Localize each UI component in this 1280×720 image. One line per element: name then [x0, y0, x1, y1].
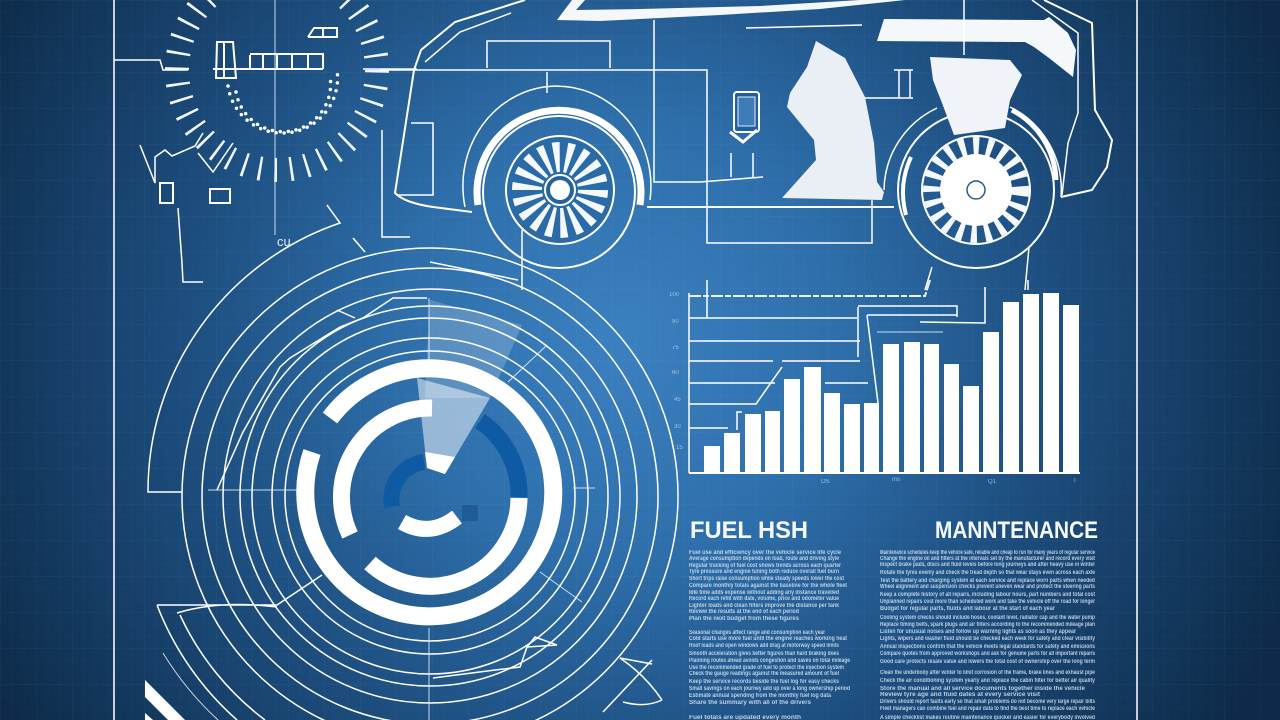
dark ring segments: [480, 421, 519, 497]
text block: fuel: Roof loads and open windows add drag at motorway speed limits: [689, 643, 840, 649]
text block: fuel: Check the gauge readings against the measured amount of fuel: [689, 671, 839, 677]
rear wheel: [884, 107, 1061, 268]
front wheel: [463, 86, 651, 268]
text block: maintenance: Test the battery and charging system at each service and replace worn parts when needed: [880, 578, 1095, 584]
roof panel: [557, 0, 905, 21]
text block: maintenance: Rotate the tyres evenly and check the tread depth so that wear stays even across each axle: [880, 570, 1096, 576]
pale wedge: [425, 300, 522, 398]
axis labels: 45: [674, 397, 681, 403]
dimension label: cu: [277, 234, 291, 249]
text block: fuel: Plan the next budget from these figures: [689, 616, 800, 622]
text block: fuel: Smooth acceleration gives better figures than hard braking does: [689, 651, 840, 657]
text block: fuel: Share the summary with all of the drivers: [689, 700, 812, 706]
gauge sketch: [114, 0, 417, 282]
axis labels: [669, 292, 1077, 485]
text block: maintenance: Check the air conditioning system yearly and replace the cabin filter for better air quality: [880, 678, 1096, 684]
text block: maintenance: Wheel alignment and suspension checks prevent uneven wear and protect the steering parts: [880, 584, 1096, 590]
text block: fuel: Fuel use and efficiency over the vehicle service life cycle: [689, 550, 842, 556]
text block: fuel: Small savings on each journey add up over a long ownership period: [689, 686, 850, 692]
axis labels: 90: [672, 319, 679, 325]
text block: fuel: Seasonal changes affect range and consumption each year: [689, 630, 826, 636]
axis labels: 60: [672, 370, 679, 376]
axis labels: 75: [672, 345, 679, 351]
axis labels: 100: [669, 292, 680, 298]
axis labels: 15: [676, 445, 683, 451]
concentric blueprint circles: [148, 205, 678, 720]
text block: maintenance: Annual inspections confirm that the vehicle meets legal standards for safety and emissions: [880, 644, 1096, 650]
text block: maintenance: Maintenance schedules keep the vehicle safe, reliable and cheap to run for many years of regular service: [880, 550, 1095, 556]
door panel: [782, 41, 884, 200]
heading: fuel: FUEL HSH: [690, 517, 808, 544]
text block: maintenance: Change the engine oil and filters at the intervals set by the manufacturer and record every visit: [880, 556, 1095, 562]
text block: maintenance: Keep a complete history of all repairs, including labour hours, part numbers and total cost: [880, 592, 1095, 598]
text block: maintenance: Clean the underbody after winter to limit corrosion of the frame, brake lines and exhaust pipe: [880, 670, 1096, 676]
text block: fuel: Keep the service records beside the fuel log for easy checks: [689, 679, 840, 685]
chart guide lines: [689, 280, 1028, 473]
corner stripes: [145, 680, 185, 720]
text block: maintenance: Budget for regular parts, fluids and labour at the start of each year: [880, 606, 1056, 612]
text block: maintenance: Good care protects resale value and lowers the total cost of ownership over the long term: [880, 659, 1095, 665]
text block: maintenance: Replace timing belts, spark plugs and air filters according to the recommended mileage plan: [880, 622, 1095, 628]
text block: maintenance: Drivers should report faults early so that small problems do not become very large repair bills: [880, 699, 1096, 705]
dimension label: [277, 234, 365, 252]
bars: [704, 293, 1079, 473]
text block: fuel: Review the results at the end of each period: [689, 609, 799, 615]
text block: fuel: Regular tracking of fuel cost shows trends across each quarter: [689, 563, 842, 569]
text block: fuel: Average consumption depends on load, route and driving style: [689, 556, 840, 562]
inner ring segments: [402, 517, 457, 529]
text block: fuel: Compare monthly totals against the baseline for the whole fleet: [689, 583, 847, 589]
text block: fuel: Planning routes ahead avoids congestion and saves on total mileage: [689, 658, 851, 664]
text block: fuel: Cold starts use more fuel until the engine reaches working heat: [689, 636, 847, 642]
icon: charging device: [730, 92, 759, 142]
text block: fuel: Use the recommended grade of fuel to protect the injection system: [689, 665, 844, 671]
text block: maintenance: Unplanned repairs cost more than scheduled work and take the vehicle off the road for longer: [880, 599, 1096, 605]
text block: maintenance: Listen for unusual noises and follow up warning lights as soon as they appear: [880, 629, 1077, 635]
rear upper panel: [877, 17, 1076, 77]
text block: fuel: Record each refill with date, volume, price and odometer value: [689, 596, 840, 602]
text block: fuel: Lighter loads and clean filters improve the distance per tank: [689, 603, 840, 609]
text block: maintenance: Review tyre age and fluid dates at every service visit: [880, 692, 1040, 698]
bar chart: [669, 280, 1080, 485]
axis labels: T: [1073, 478, 1077, 484]
radial chart: [148, 205, 678, 720]
text block: maintenance: Cooling system checks should include hoses, coolant level, radiator cap and the water pump: [880, 615, 1095, 621]
text block: fuel: Tyre pressure and engine tuning both reduce overall fuel burn: [689, 569, 839, 575]
axis labels: OS: [821, 479, 830, 485]
text block: fuel: Idle time adds expense without adding any distance travelled: [689, 590, 839, 596]
text block: maintenance: Compare quotes from approved workshops and ask for genuine parts for all important repairs: [880, 651, 1096, 657]
text block: maintenance: Store the manual and all service documents together inside the vehicle: [880, 686, 1086, 692]
outer ring: [305, 368, 553, 616]
text block: fuel: [689, 550, 851, 720]
text block: fuel: Estimate annual spending from the monthly fuel log data: [689, 693, 832, 699]
text block: maintenance: Fleet managers can combine fuel and repair data to find the best time to replace each vehicle: [880, 706, 1096, 712]
text block: fuel: Short trips raise consumption while steady speeds lower the cost: [689, 576, 844, 582]
axis labels: ms: [892, 477, 900, 483]
axis labels: 30: [674, 424, 681, 430]
heading: maintenance: MANNTENANCE: [935, 517, 1098, 544]
vehicle blueprint: [380, 0, 1112, 290]
text block: maintenance: Inspect brake pads, discs and fluid levels before long journeys and after heavy use in winter: [880, 562, 1096, 568]
body outline: [395, 0, 1112, 212]
text block: maintenance: Lights, wipers and washer fluid should be checked each week for safety and clear visibility: [880, 636, 1096, 642]
axis labels: Q1: [988, 479, 997, 485]
middle ring segments: [341, 408, 432, 535]
text block: maintenance: [880, 550, 1096, 720]
rear wheel arch panel: [930, 57, 1022, 135]
